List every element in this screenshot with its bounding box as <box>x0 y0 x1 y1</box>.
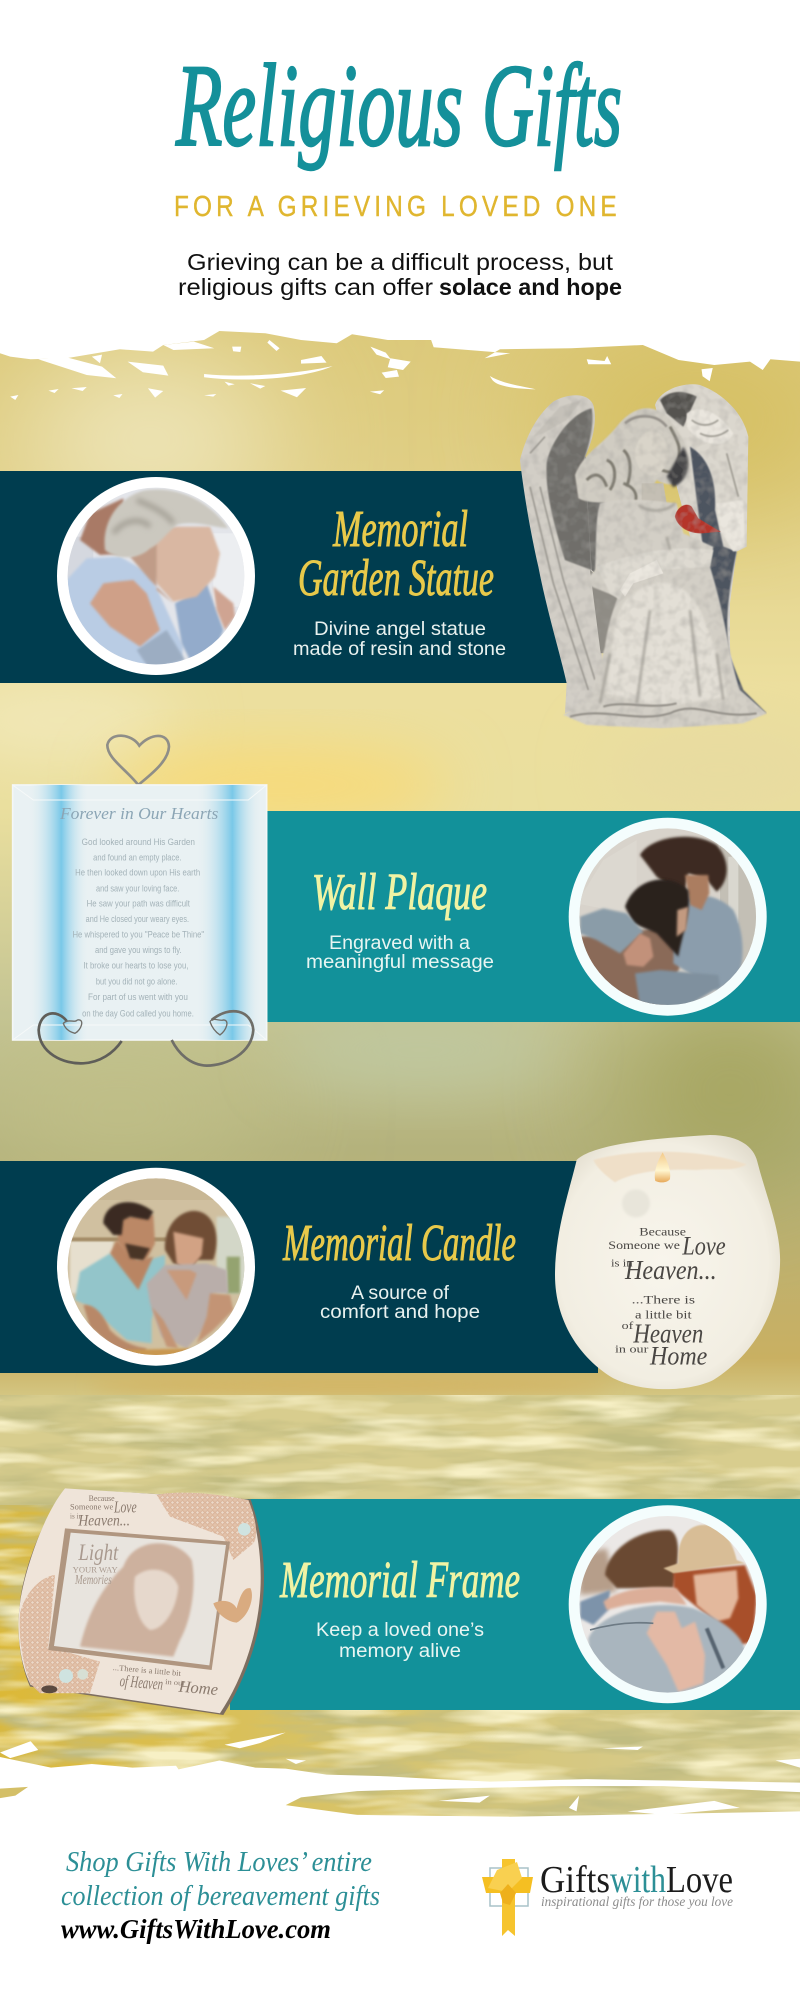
title: Gifts <box>482 40 622 171</box>
candle product <box>555 1135 780 1389</box>
description: Keep a loved one’s <box>316 1620 484 1641</box>
description: Divine angel statue <box>314 619 486 640</box>
description <box>316 1620 484 1662</box>
frame product: Light <box>78 1540 119 1566</box>
wordmark <box>540 1859 733 1901</box>
heading <box>298 501 494 607</box>
shop text <box>61 1846 380 1912</box>
band <box>262 811 800 1022</box>
subtitle: FOR A GRIEVING LOVED ONE <box>174 190 617 222</box>
frame product: Memories <box>74 1572 112 1587</box>
description: memory alive <box>339 1641 461 1662</box>
plaque product: and found an empty place. <box>93 852 181 862</box>
description: meaningful message <box>306 952 494 973</box>
frame product: YOUR WAY <box>73 1566 118 1575</box>
candle product: Heaven... <box>624 1255 717 1285</box>
torn white edge: bottom <box>0 1732 800 2000</box>
description: made of resin and stone <box>293 639 506 660</box>
candle product: Because <box>639 1225 686 1238</box>
heading: Wall Plaque <box>312 864 487 921</box>
frame product: Heaven... <box>77 1513 130 1530</box>
statue: kneeling angel <box>520 384 767 728</box>
website: www.GiftsWithLove.com <box>61 1914 331 1944</box>
heading: Memorial Candle <box>282 1215 516 1272</box>
frame product: Someone we <box>70 1502 114 1511</box>
gold background panel <box>0 330 800 1825</box>
panel: memorial candle <box>0 1135 780 1389</box>
description: A source of <box>351 1283 450 1304</box>
description: comfort and hope <box>320 1302 480 1323</box>
candle product: a little bit <box>635 1307 692 1321</box>
shop text: collection of bereavement gifts <box>61 1880 380 1912</box>
plaque product: and saw your loving face. <box>96 883 179 893</box>
frame product: Home <box>177 1677 219 1699</box>
wire heart stand <box>107 736 169 785</box>
description <box>306 933 494 973</box>
panel: wall plaque <box>13 736 800 1066</box>
candle product: Love <box>681 1230 726 1260</box>
frame product: is in <box>70 1511 82 1520</box>
candle product: Home <box>649 1340 707 1370</box>
candle product: Someone we <box>608 1239 680 1252</box>
frame product: Love <box>113 1498 137 1517</box>
heading: Memorial <box>332 501 468 558</box>
plaque product: on the day God called you home. <box>82 1009 194 1019</box>
candle product: in our <box>615 1344 649 1355</box>
photo: two women hugging <box>568 818 767 1016</box>
panel: memorial frame <box>18 1488 800 1715</box>
photo: woman in hat hugging <box>568 1505 767 1704</box>
plaque product: Forever in Our Hearts <box>59 804 218 823</box>
plaque product: He then looked down upon His earth <box>75 868 200 878</box>
frame product: of Heaven <box>119 1671 164 1694</box>
description: Engraved with a <box>329 933 470 954</box>
frame product: Because <box>89 1494 115 1503</box>
icon: cross with ribbon <box>482 1859 533 1936</box>
plaque product: He whispered to you "Peace be Thine" <box>72 929 204 939</box>
description <box>293 619 506 660</box>
logo: Gifts with Love <box>482 1859 733 1936</box>
band <box>230 1499 800 1710</box>
title: Religious <box>175 40 463 171</box>
frame product: in our <box>165 1677 186 1688</box>
plaque product: God looked around His Garden <box>82 837 195 847</box>
wire feet <box>39 1013 122 1063</box>
wordmark: Love <box>666 1859 733 1901</box>
heading: Garden Statue <box>298 550 494 607</box>
candle product: is in <box>611 1258 633 1269</box>
frame product <box>18 1488 264 1715</box>
heading: Memorial Frame <box>279 1552 520 1609</box>
intro text: religious gifts can offer <box>178 274 433 300</box>
photo: embrace with older woman <box>57 477 255 675</box>
intro text: solace and hope <box>439 274 622 300</box>
photo: couple comforting <box>57 1168 255 1366</box>
shop text: Shop Gifts With Loves’ entire <box>66 1846 372 1878</box>
plaque product: It broke our hearts to lose you, <box>83 961 188 971</box>
band <box>0 471 570 683</box>
plaque product: and gave you wings to fly. <box>95 945 182 955</box>
wordmark: Gifts <box>540 1859 610 1901</box>
intro text: Grieving can be a difficult process, but <box>187 249 614 275</box>
plaque product: but you did not go alone. <box>96 976 177 986</box>
band <box>0 1161 598 1373</box>
plaque product: He saw your path was difficult <box>87 899 190 909</box>
candle product: ...There is <box>632 1292 695 1306</box>
torn white edge: top <box>0 0 800 400</box>
plaque product <box>13 736 267 1066</box>
frame product: ...There is a little bit <box>112 1663 182 1678</box>
description <box>320 1283 480 1323</box>
intro text <box>178 249 622 300</box>
ocean waves <box>0 1395 800 1825</box>
wordmark: with <box>610 1859 666 1901</box>
call to action <box>61 1846 380 1944</box>
plaque product: For part of us went with you <box>88 992 188 1002</box>
candle product: of <box>622 1321 634 1332</box>
panel: memorial garden statue <box>0 384 767 728</box>
tagline: inspirational gifts for those you love <box>541 1895 733 1910</box>
candle product: Heaven <box>632 1318 703 1348</box>
plaque product: and He closed your weary eyes. <box>86 914 189 924</box>
